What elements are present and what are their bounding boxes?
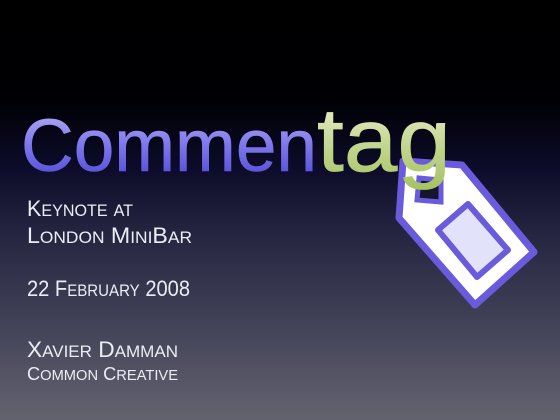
- text: author: XAVIER DAMMAN: [27, 337, 178, 362]
- text: date: 22 FEBRUARY 2008: [27, 276, 190, 301]
- tag label: [438, 204, 508, 277]
- tag hole: [417, 178, 441, 202]
- text: london minibar: LONDON MINIBAR: [27, 223, 192, 248]
- tag body: [399, 161, 534, 305]
- icon: price tag: [399, 161, 534, 305]
- text: keynote: KEYNOTE AT: [27, 196, 133, 221]
- title word: Commen: Commen: [21, 104, 317, 187]
- title word: tag: tag: [317, 91, 451, 191]
- text: company: COMMON CREATIVE: [27, 364, 178, 384]
